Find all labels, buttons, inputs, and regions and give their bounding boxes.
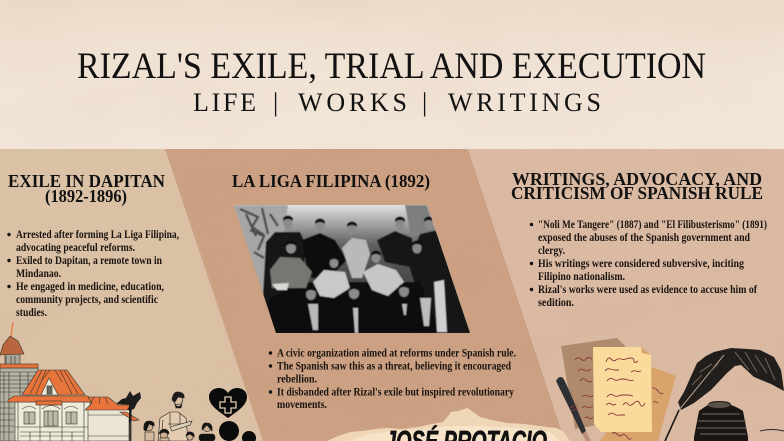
bullet list: liga: A civic organization aimed at reforms under Spanish rule. [277,346,516,360]
heading: exile: (1892-1896) [45,186,127,206]
header band [0,0,784,149]
bullet list: exile: He engaged in medicine, education, [16,280,164,293]
heading: liga: LA LIGA FILIPINA (1892) [232,171,430,191]
group photograph [230,203,475,335]
icon: quill feather [665,348,784,441]
bullet list: writings: clergy. [538,244,565,257]
heading: exile: EXILE IN DAPITAN [8,171,165,191]
subtitle [193,88,601,117]
bullet list: exile: Mindanao. [16,267,61,280]
bullet list: writings: exposed the abuses of the Spanish government and [538,231,750,244]
torn paper banner [327,408,570,441]
icon: heart with cross [209,388,247,418]
bullet list: exile [7,228,179,319]
subtitle: WORKS [298,88,407,117]
panel: liga background [165,149,565,441]
bullet list: writings: sedition. [538,296,574,309]
bullet list: exile: studies. [16,306,47,319]
heading: writings: CRITICISM OF SPANISH RULE [511,183,763,203]
panel: writings background [468,149,784,441]
icon: palm tree [116,391,141,422]
panel: writings and advocacy [511,169,784,441]
bullet list: liga: It disbanded after Rizal's exile but inspired revolutionary [277,386,514,398]
bullet list: liga: The Spanish saw this as a threat, believing it encouraged [277,360,511,372]
bullet list: liga: movements. [277,398,327,411]
panel: exile in Dapitan [0,171,256,441]
illustration: stacked papers [561,338,676,441]
title: RIZAL'S EXILE, TRIAL AND EXECUTION [77,46,706,87]
bullet list: exile: community projects, and scientific [16,293,158,306]
bullet list: exile: Exiled to Dapitan, a remote town in [16,254,162,267]
bullet list: exile: Arrested after forming La Liga Filipina, [16,228,179,241]
icon: ink bottle [694,401,748,441]
bullet list: liga: rebellion. [277,372,317,386]
ink curve [760,430,784,431]
subtitle: LIFE [193,88,256,117]
panel: La Liga Filipina [230,171,570,441]
subtitle: | [422,88,427,117]
bullet list: liga [269,346,516,411]
icon: fountain pen [556,377,591,441]
panel: exile background [0,149,263,441]
icon: person silhouette circles [219,421,256,441]
illustration: teacher and children [144,392,215,441]
bullet list: exile: advocating peaceful reforms. [16,241,135,254]
heading: exile [8,171,165,206]
bullet list: writings: His writings were considered subversive, inciting [538,257,744,270]
subtitle: | [273,88,278,117]
heading: writings: WRITINGS, ADVOCACY, AND [512,169,762,189]
subtitle: WRITINGS [448,88,601,117]
bullet list: writings [530,218,767,309]
bullet list: writings: Filipino nationalism. [538,270,625,283]
heading: writings [511,169,763,203]
illustration: Dapitan house [0,322,139,441]
